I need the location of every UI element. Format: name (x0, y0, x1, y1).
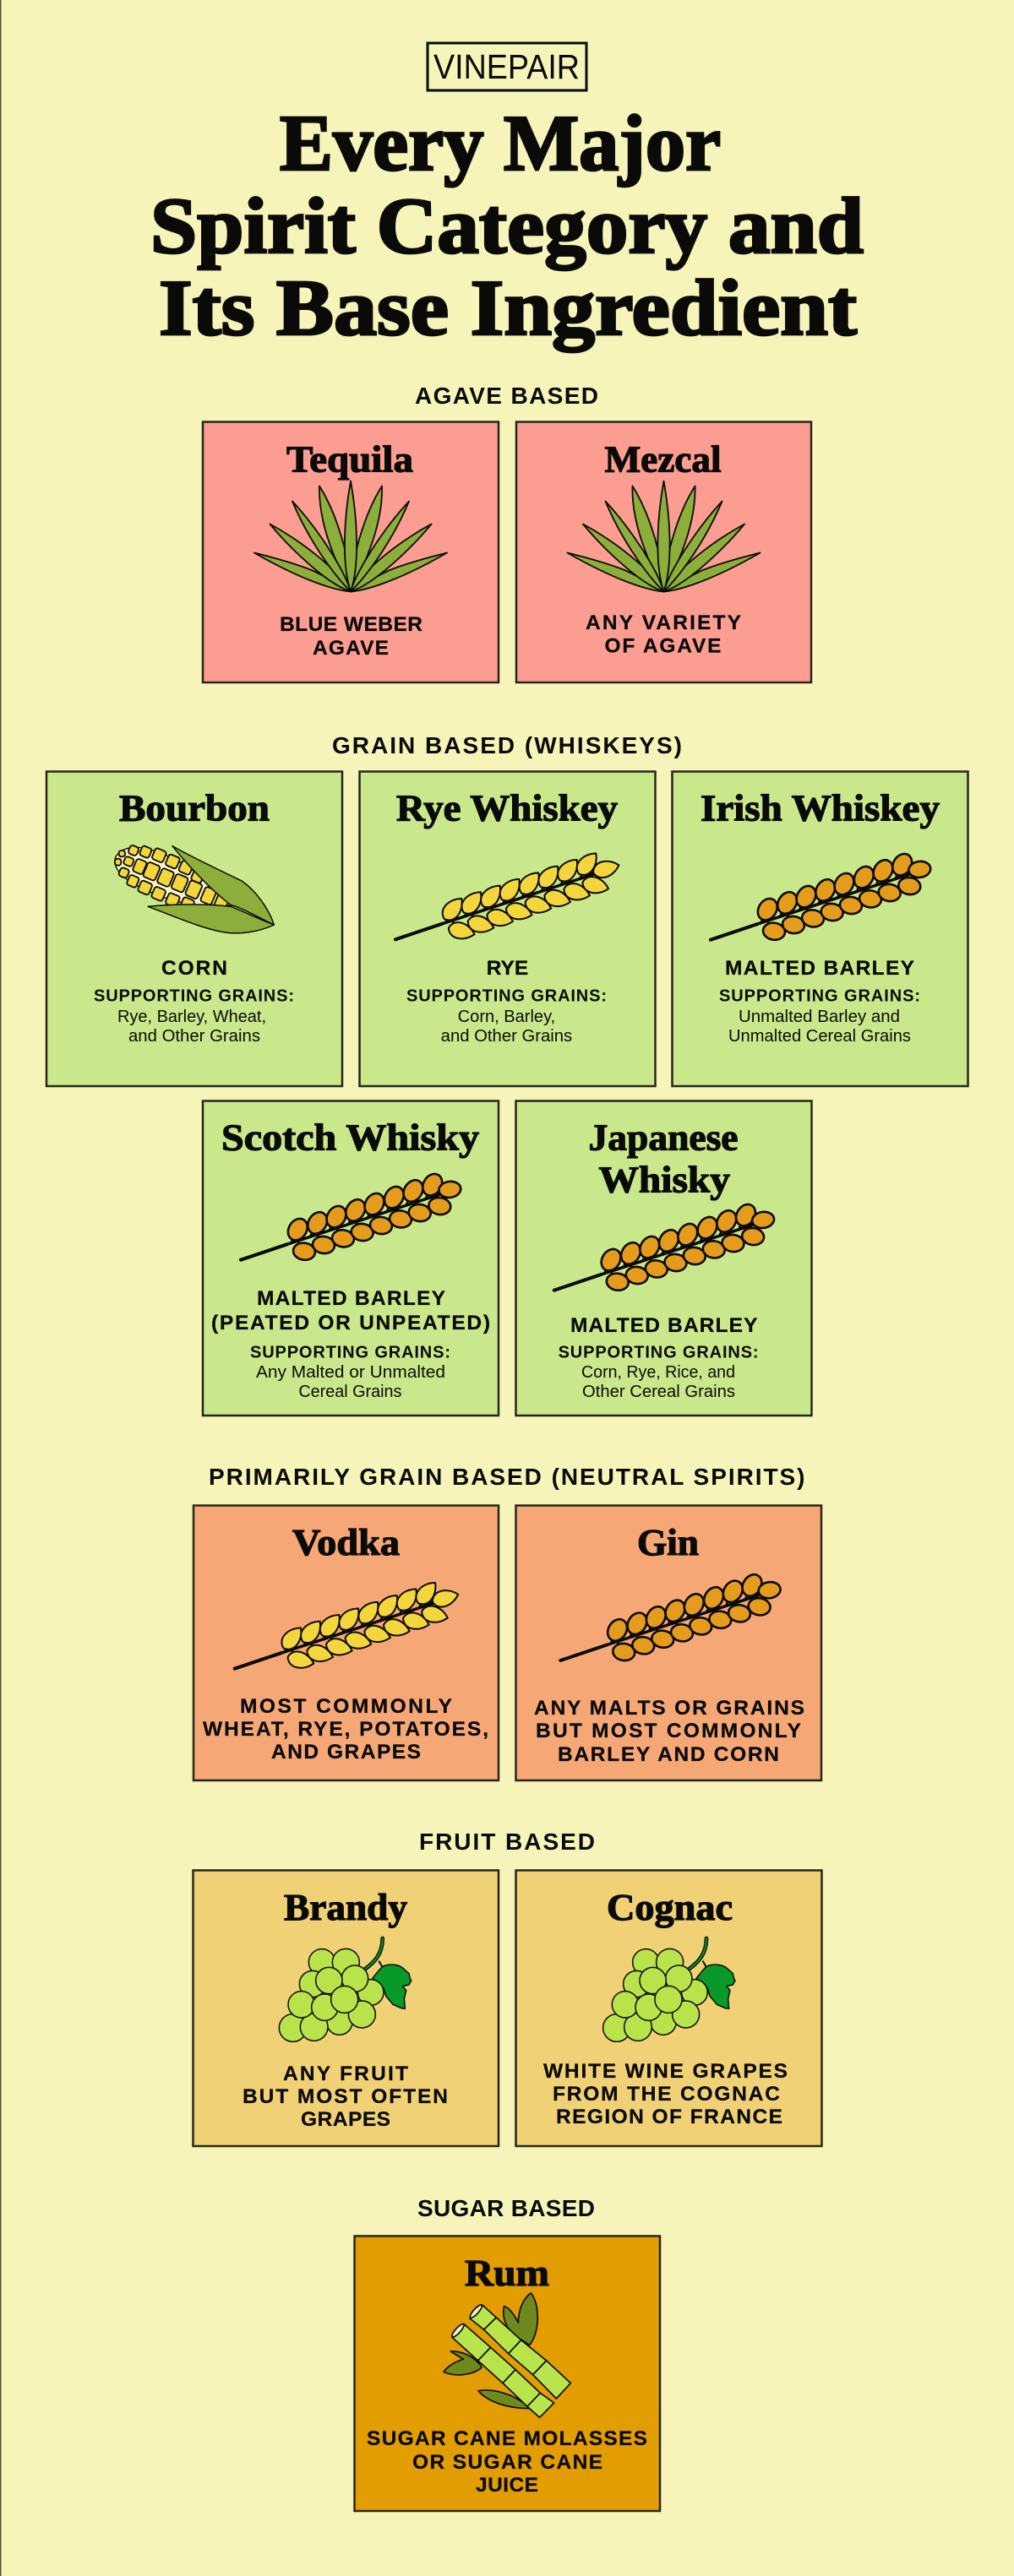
text: corn and supporting grains: Rye, Barley, Wheat, (117, 1008, 266, 1026)
title: Spirit Category and (150, 182, 864, 270)
text: malted barley and supporting grains: Unmalted Cereal Grains (728, 1027, 911, 1046)
panel: tequila (203, 422, 499, 682)
icon: barley stalk (554, 1201, 775, 1291)
heading: fruit based: FRUIT BASED (419, 1829, 595, 1855)
text: white wine grapes: WHITE WINE GRAPES (543, 2060, 788, 2083)
heading: grain based whiskeys: GRAIN BASED (WHISKEYS) (332, 732, 682, 758)
icon: barley stalk (560, 1571, 782, 1662)
panel: cognac: Cognac (607, 1887, 733, 1928)
text: blue weber agave: BLUE WEBER (280, 613, 422, 636)
text: most commonly: AND GRAPES (271, 1741, 421, 1764)
text: any malts or grains (534, 1697, 804, 1766)
panel: irish whiskey: Irish Whiskey (701, 788, 940, 829)
panel: gin (515, 1505, 821, 1780)
text: any fruit: GRAPES (301, 2108, 390, 2131)
panel: tequila: Tequila (286, 439, 413, 480)
text: malted barley and supporting grains (211, 1287, 490, 1401)
panel: rye whiskey (360, 772, 656, 1086)
icon: grapes (603, 1938, 735, 2041)
panel: brandy (193, 1870, 499, 2146)
title (150, 100, 864, 352)
text: sugar cane molasses: OR SUGAR CANE (412, 2451, 602, 2474)
text: malted barley and supporting grains: Unmalted Barley and (739, 1008, 900, 1026)
text: malted barley and supporting grains: MALTED BARLEY (725, 957, 914, 980)
heading: sugar based: SUGAR BASED (417, 2195, 595, 2221)
text: most commonly: WHEAT, RYE, POTATOES, (203, 1718, 488, 1741)
text: malted barley and supporting grains: SUPPORTING GRAINS: (719, 987, 920, 1006)
title: Its Base Ingredient (159, 264, 857, 352)
panel: mezcal (516, 422, 811, 682)
panel: bourbon (46, 772, 342, 1086)
text: malted barley and supporting grains: MALTED BARLEY (257, 1287, 445, 1310)
text: blue weber agave: AGAVE (313, 637, 389, 660)
icon: rye stalk (395, 849, 621, 942)
panel: rye whiskey: Rye Whiskey (396, 788, 618, 829)
text: any malts or grains: BUT MOST COMMONLY (536, 1720, 801, 1742)
panel: bourbon: Bourbon (119, 788, 270, 829)
text: malted barley and supporting grains: Other Cereal Grains (582, 1383, 735, 1401)
text: any malts or grains: BARLEY AND CORN (558, 1743, 779, 1766)
panel: cognac (515, 1870, 821, 2146)
icon: barley stalk (711, 851, 931, 941)
icon: sugar cane (444, 2293, 570, 2417)
text: malted barley and supporting grains: Any Malted or Unmalted (256, 1363, 445, 1382)
icon: barley stalk (241, 1171, 461, 1261)
icon: wheat stalk (235, 1578, 461, 1671)
title: Every Major (280, 100, 721, 187)
panel: vodka (194, 1505, 499, 1780)
panel: japanese whisky: Whisky (598, 1160, 730, 1201)
text: malted barley and supporting grains: (PEATED OR UNPEATED) (211, 1312, 490, 1334)
panel: japanese whisky (515, 1101, 811, 1416)
icon: grapes (279, 1938, 412, 2041)
icon: agave plant (254, 481, 447, 591)
text: malted barley and supporting grains: SUPPORTING GRAINS: (559, 1344, 759, 1362)
text: any fruit: BUT MOST OFTEN (243, 2085, 448, 2108)
text: any variety of agave: OF AGAVE (605, 635, 722, 657)
text: corn and supporting grains: and Other Grains (128, 1027, 260, 1046)
icon: corn cob (115, 845, 274, 933)
text: any fruit: ANY FRUIT (283, 2062, 408, 2085)
panel: vodka: Vodka (292, 1522, 400, 1563)
text: white wine grapes: FROM THE COGNAC (553, 2083, 780, 2106)
text: malted barley and supporting grains: SUPPORTING GRAINS: (250, 1344, 450, 1362)
text: any malts or grains: ANY MALTS OR GRAINS (534, 1697, 804, 1720)
text: malted barley and supporting grains (559, 1314, 759, 1401)
text: rye and supporting grains (406, 957, 607, 1046)
text: corn and supporting grains (94, 957, 294, 1046)
text: sugar cane molasses (367, 2427, 647, 2497)
text: most commonly (203, 1695, 488, 1764)
panel: gin: Gin (637, 1522, 699, 1563)
panel: irish whiskey (673, 772, 968, 1086)
text: sugar cane molasses: SUGAR CANE MOLASSES (367, 2427, 647, 2450)
panel: brandy: Brandy (284, 1887, 407, 1928)
panel: japanese whisky: Japanese (588, 1117, 739, 1159)
panel: rum (355, 2236, 660, 2511)
text: malted barley and supporting grains (719, 957, 920, 1046)
panel: mezcal: Mezcal (605, 439, 722, 480)
text: any variety of agave: ANY VARIETY (586, 611, 741, 634)
logo: VinePair: VINEPAIR (433, 47, 580, 86)
text: corn and supporting grains: CORN (161, 957, 227, 980)
text: any variety of agave (586, 611, 741, 657)
icon: agave plant (568, 481, 760, 591)
panel: scotch whisky (203, 1101, 499, 1416)
text: malted barley and supporting grains: MALTED BARLEY (570, 1314, 757, 1337)
text: blue weber agave (280, 613, 422, 660)
text: corn and supporting grains: SUPPORTING GRAINS: (94, 987, 294, 1006)
panel: rum: Rum (465, 2253, 549, 2294)
text: malted barley and supporting grains: Cereal Grains (298, 1383, 401, 1401)
text: malted barley and supporting grains: Corn, Rye, Rice, and (581, 1363, 735, 1382)
text: white wine grapes: REGION OF FRANCE (556, 2106, 782, 2128)
text: most commonly: MOST COMMONLY (240, 1695, 452, 1718)
text: rye and supporting grains: RYE (487, 957, 528, 980)
text: rye and supporting grains: and Other Grains (441, 1027, 572, 1046)
text: any fruit (243, 2062, 448, 2131)
heading: primarily grain based: PRIMARILY GRAIN BASED (NEUTRAL SPIRITS) (209, 1464, 804, 1490)
heading: agave based: AGAVE BASED (415, 383, 598, 409)
text: sugar cane molasses: JUICE (476, 2474, 538, 2497)
text: rye and supporting grains: Corn, Barley, (458, 1008, 555, 1026)
panel: scotch whisky: Scotch Whisky (221, 1117, 479, 1159)
text: white wine grapes (543, 2060, 788, 2128)
text: rye and supporting grains: SUPPORTING GRAINS: (406, 987, 607, 1006)
